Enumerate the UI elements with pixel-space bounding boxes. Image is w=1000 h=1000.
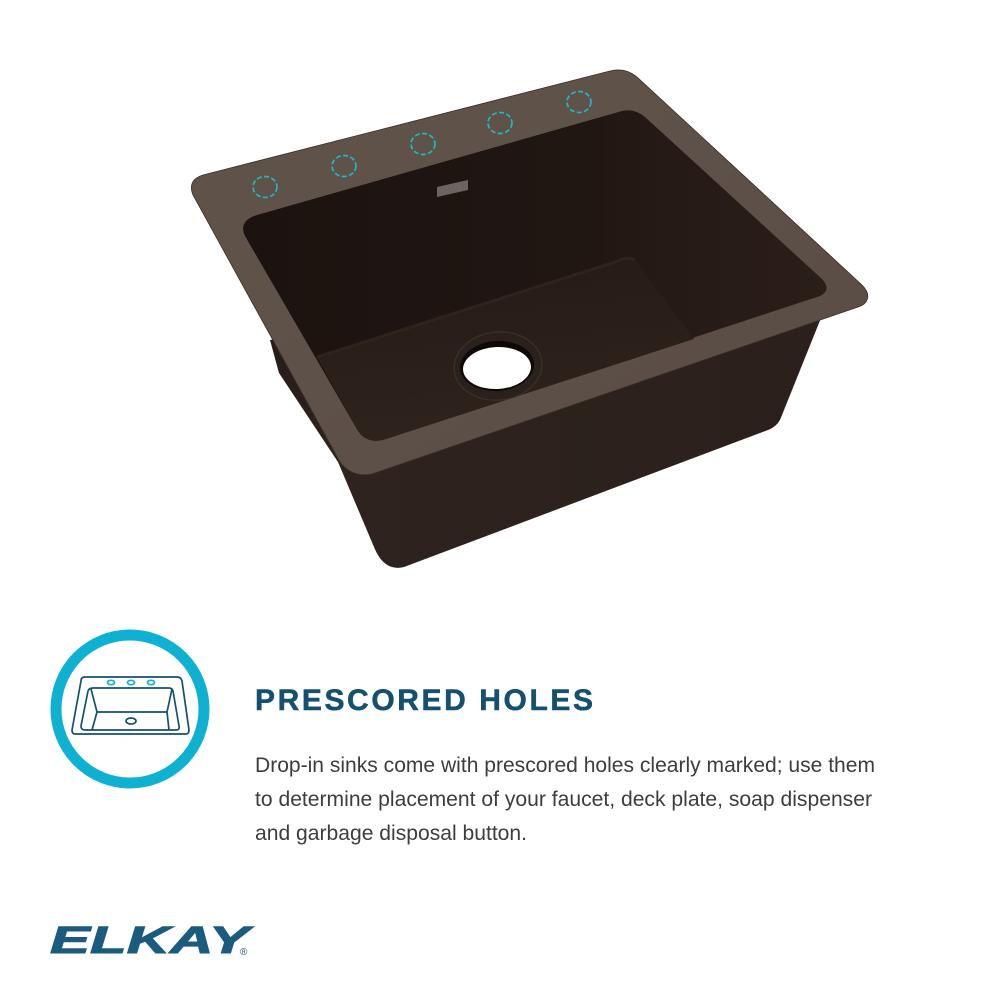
logo: Elkay: ®	[240, 947, 248, 958]
floor joint highlight	[317, 258, 635, 357]
hole 2	[332, 156, 356, 176]
hole 3	[411, 134, 435, 154]
icon sink outline	[72, 677, 189, 734]
logo: Elkay: ELKAY	[50, 920, 255, 962]
hole 4	[488, 112, 512, 134]
sink outer body	[270, 300, 821, 568]
hole 5	[567, 92, 591, 112]
icon faucet holes	[108, 680, 154, 685]
body text: to determine placement of your faucet, deck plate, soap dispenser	[255, 788, 872, 811]
logo: Elkay	[50, 920, 255, 962]
drain opening	[462, 345, 532, 391]
drain flange	[451, 328, 545, 404]
icon: sink in circle	[56, 635, 204, 783]
icon ring	[56, 635, 204, 783]
basin opening	[243, 110, 827, 441]
hole 1	[253, 176, 277, 198]
basin back and right walls	[243, 110, 827, 441]
logo badge	[437, 180, 468, 197]
heading: PRESCORED HOLES	[255, 684, 593, 717]
basin floor	[317, 258, 694, 441]
sink rim	[191, 70, 868, 475]
body text: and garbage disposal button.	[255, 822, 527, 845]
prescored holes	[253, 92, 591, 198]
body text: Drop-in sinks come with prescored holes clearly marked; use them	[255, 754, 875, 777]
sink product illustration	[191, 70, 868, 568]
body text	[255, 754, 875, 845]
drain inner ring	[458, 338, 536, 394]
